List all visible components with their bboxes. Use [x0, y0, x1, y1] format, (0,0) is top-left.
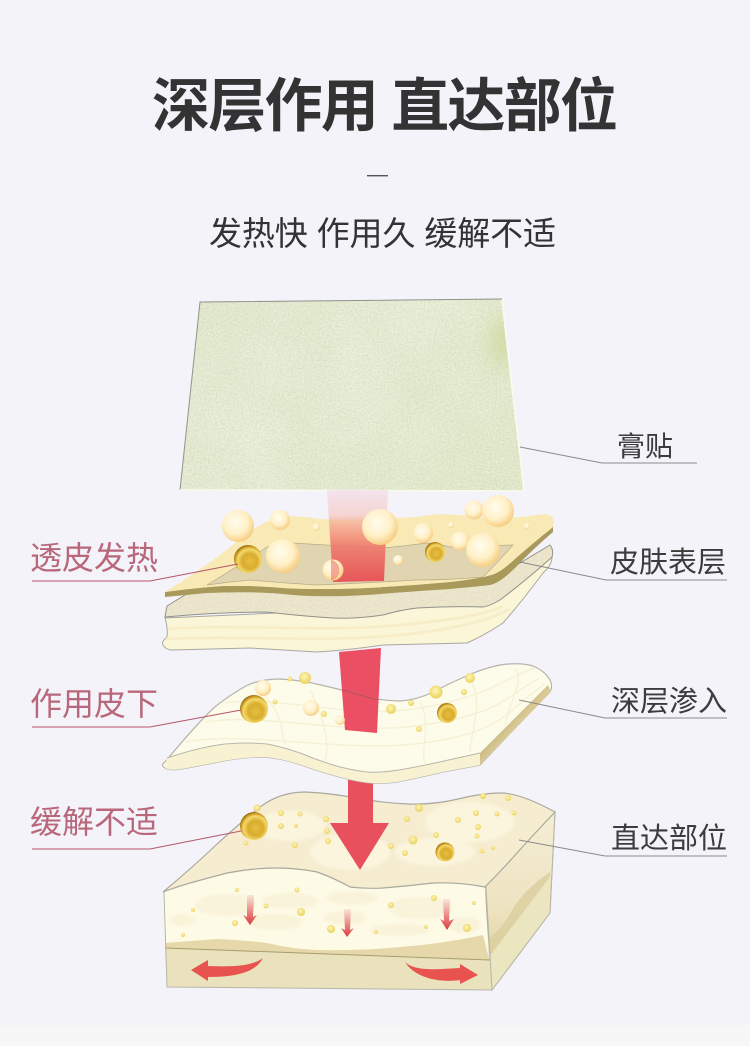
- subtitle: 发热快 作用久 缓解不适: [209, 215, 556, 252]
- leader and label: direct reach: [519, 822, 727, 856]
- nutrient dots: block front: [181, 888, 476, 937]
- nutrient dots: block top: [244, 793, 516, 856]
- callout: subcutaneous action: [30, 686, 241, 727]
- label leader: plaster: [520, 447, 697, 463]
- olive band: [165, 527, 553, 597]
- callout: relieve discomfort: [30, 804, 241, 849]
- front marbling: [169, 891, 481, 936]
- lower cream layer: [162, 557, 552, 652]
- front base: [165, 948, 492, 990]
- sheet grid: [185, 668, 545, 765]
- background band: [0, 1025, 750, 1046]
- layer: skin surface: [160, 514, 556, 652]
- side arrow right: [405, 962, 478, 984]
- leader and label: direct reach: 直达部位: [611, 822, 727, 855]
- callout: transdermal heat: 透皮发热: [30, 540, 158, 576]
- label: plaster: 膏贴: [617, 431, 673, 462]
- short divider: [367, 175, 388, 176]
- red beam through sheet: [339, 648, 381, 733]
- layer: deep tissue block: [163, 792, 555, 990]
- gold spheres: block: [240, 812, 454, 862]
- layer: subcutaneous sheet: [162, 664, 552, 783]
- top surface: [163, 792, 555, 892]
- callout: relieve discomfort: 缓解不适: [30, 804, 158, 840]
- nutrient spheres: skin surface: [222, 495, 530, 580]
- leader and label: deep penetration: 深层渗入: [611, 685, 727, 718]
- small red arrows down: [243, 895, 454, 937]
- callout: transdermal heat: [30, 540, 238, 581]
- side arrow left: [191, 958, 263, 981]
- leader and label: skin surface: [520, 546, 727, 580]
- inner grey inset: [207, 543, 513, 585]
- beam from plaster: [327, 490, 388, 582]
- front tan band: [165, 935, 490, 960]
- sheet side facet: [480, 685, 551, 765]
- cream top surface: [165, 514, 554, 592]
- sandy middle layer: [165, 545, 553, 618]
- title: 深层作用 直达部位: [152, 74, 618, 139]
- plaster patch: [175, 295, 530, 495]
- callout: subcutaneous action: 作用皮下: [30, 686, 158, 722]
- top marbling: [255, 802, 515, 870]
- big red arrow: [330, 780, 389, 870]
- nutrient spheres: sheet: [240, 672, 475, 732]
- leader and label: deep penetration: [519, 685, 727, 718]
- right side face: [485, 812, 555, 990]
- front face cream: [163, 868, 488, 953]
- leader and label: skin surface: 皮肤表层: [610, 546, 726, 579]
